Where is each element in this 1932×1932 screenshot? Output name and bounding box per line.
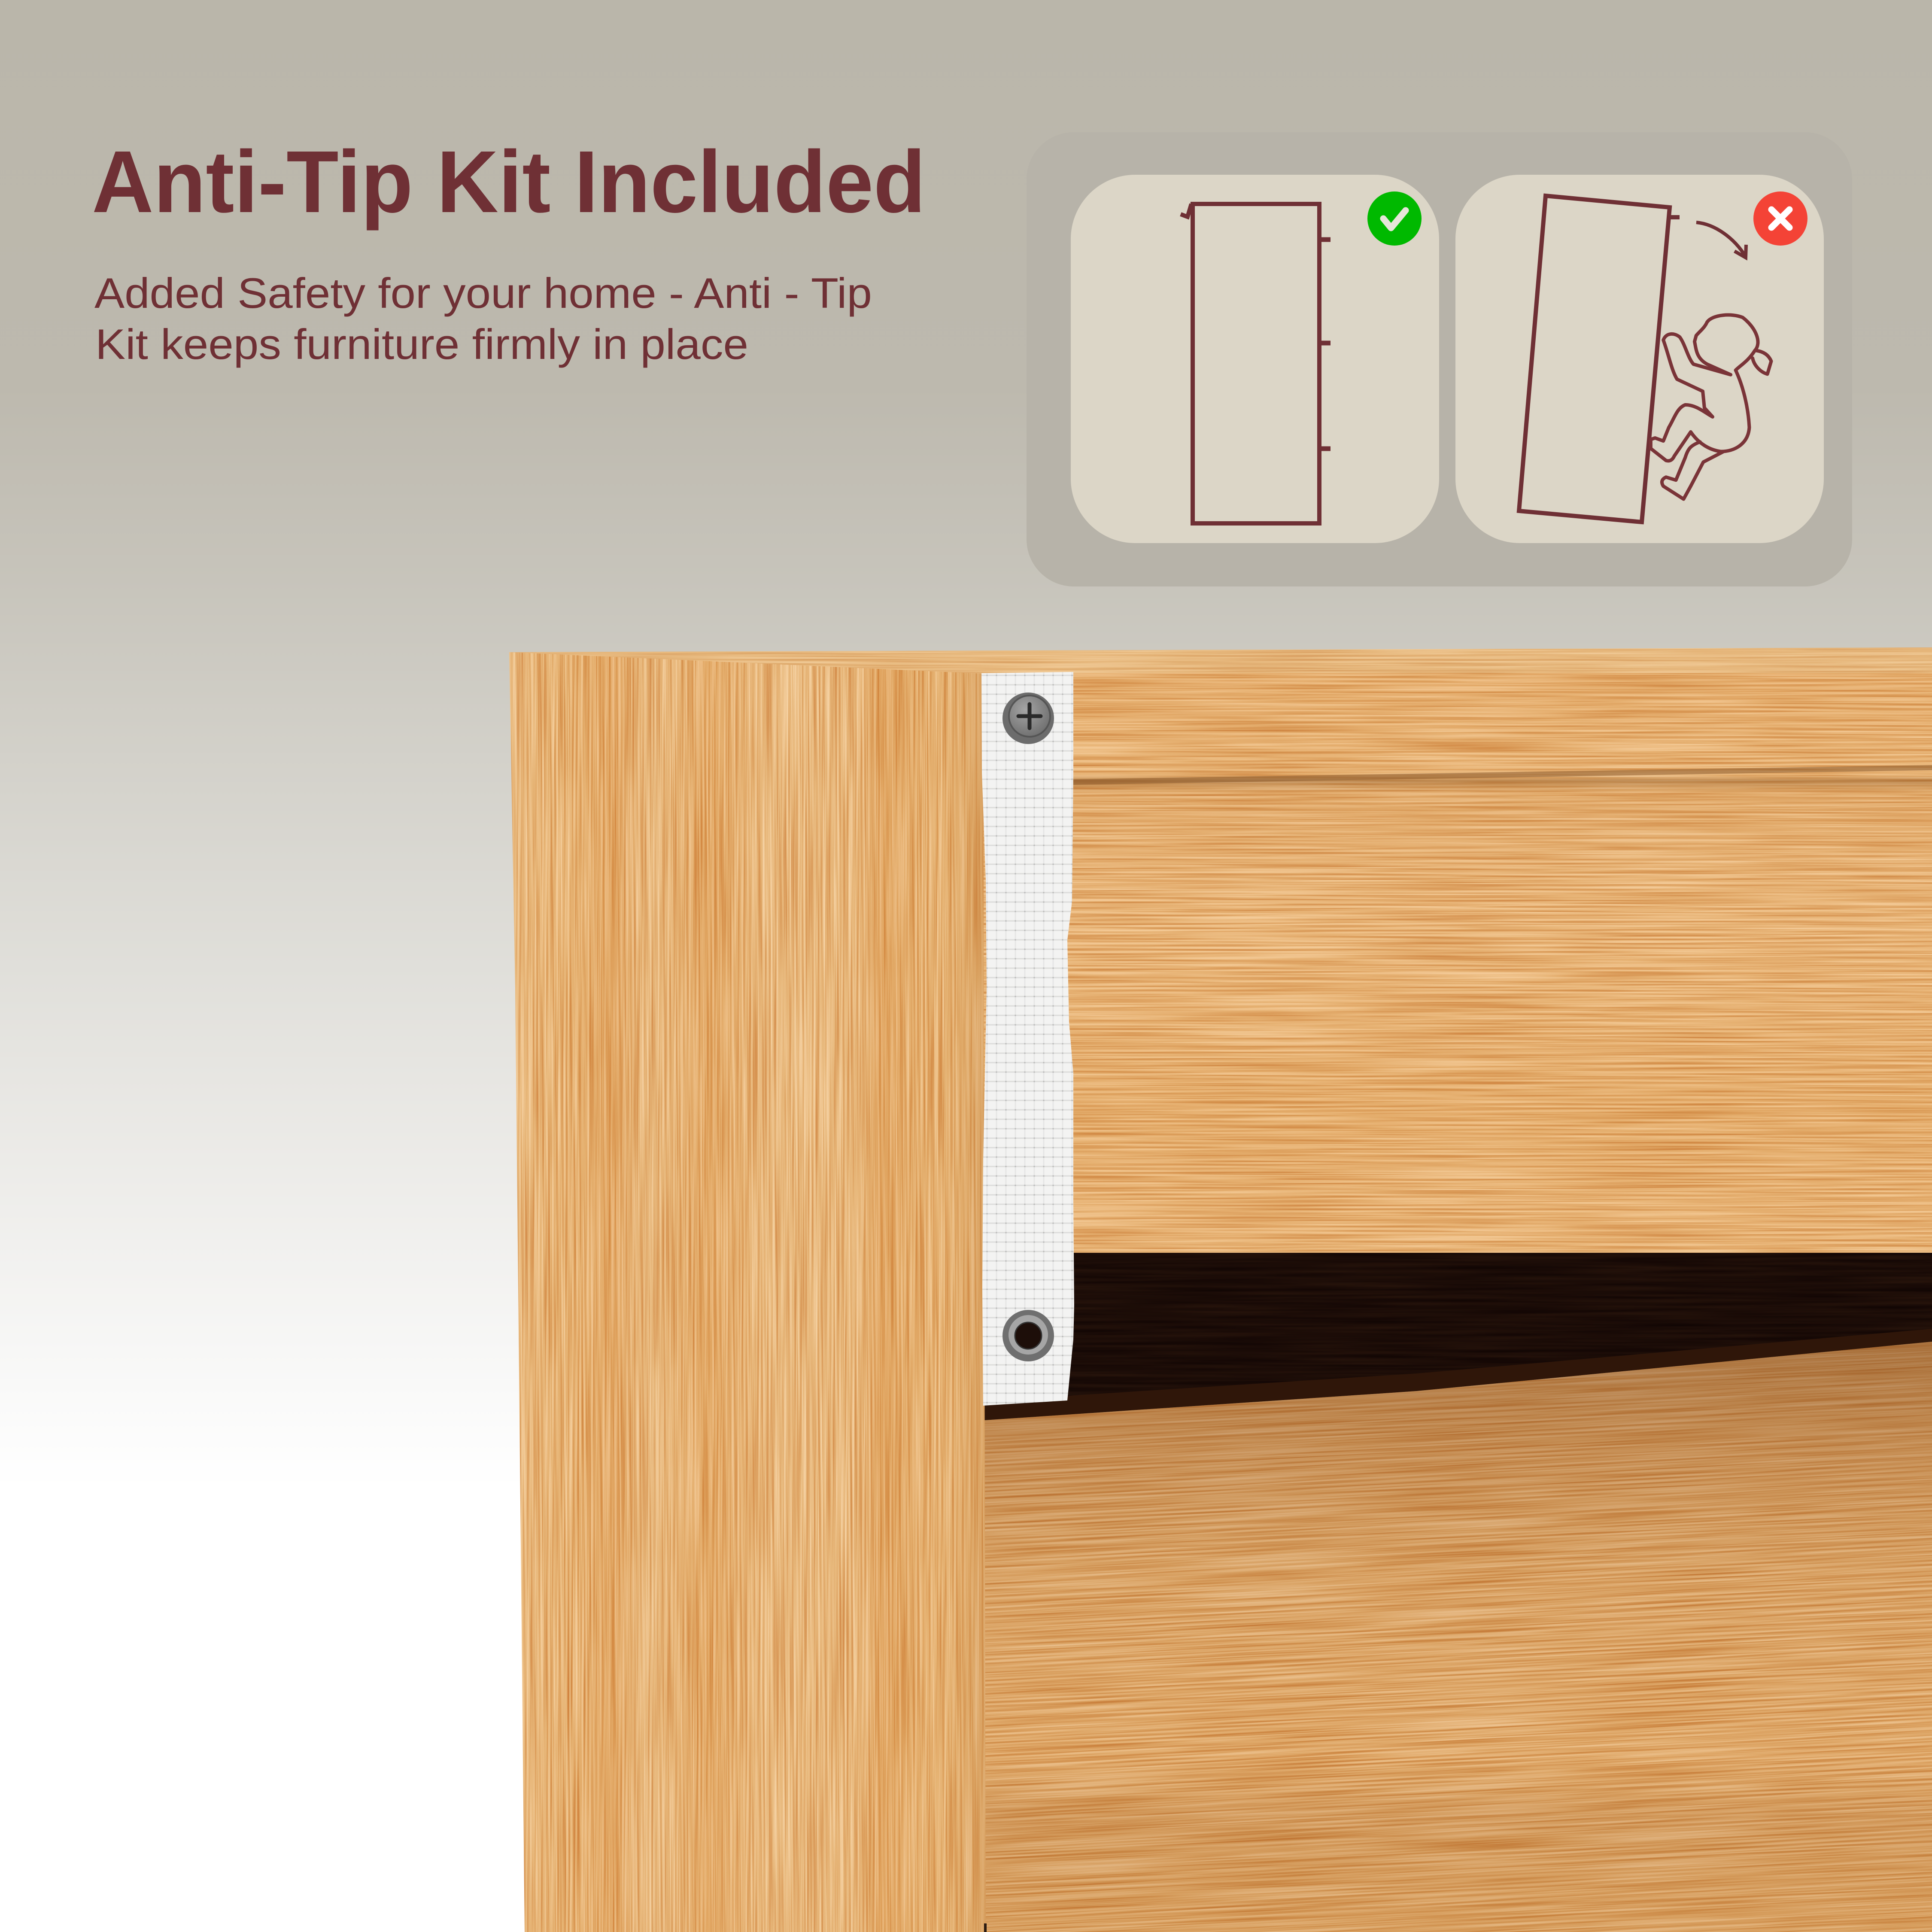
- description text: [94, 269, 872, 368]
- white anti-tip strap: [981, 672, 1074, 1406]
- dark recess between panels: [981, 1253, 1932, 1420]
- description text: Added Safety for your home - Anti - Tip: [94, 269, 872, 317]
- icon: cross badge: [1753, 191, 1807, 246]
- cabinet: [507, 644, 1932, 1932]
- panel: incorrect use: [1455, 175, 1824, 543]
- screw: [1002, 693, 1054, 744]
- icon: anchored cabinet: [1181, 204, 1331, 523]
- description text: Kit keeps furniture firmly in place: [95, 320, 748, 368]
- cabinet top face: [511, 647, 1932, 674]
- icon: climbing child: [1651, 315, 1771, 499]
- small shadow foot detail: [984, 1923, 987, 1932]
- cabinet lower front panel: [927, 1261, 1932, 1932]
- grommet: [1002, 1310, 1054, 1361]
- title: Anti-Tip Kit Included: [92, 133, 926, 231]
- panel: do and don't comparison: [1027, 132, 1852, 586]
- cabinet side panel: [507, 648, 987, 1932]
- icon: tipping cabinet: [1519, 196, 1680, 522]
- panel: correct use: [1071, 175, 1439, 543]
- icon: check badge: [1367, 191, 1422, 246]
- lower lip of recess: [984, 1329, 1932, 1420]
- icon: tipping arrow: [1696, 222, 1746, 258]
- cabinet upper front panel: [983, 673, 1932, 1253]
